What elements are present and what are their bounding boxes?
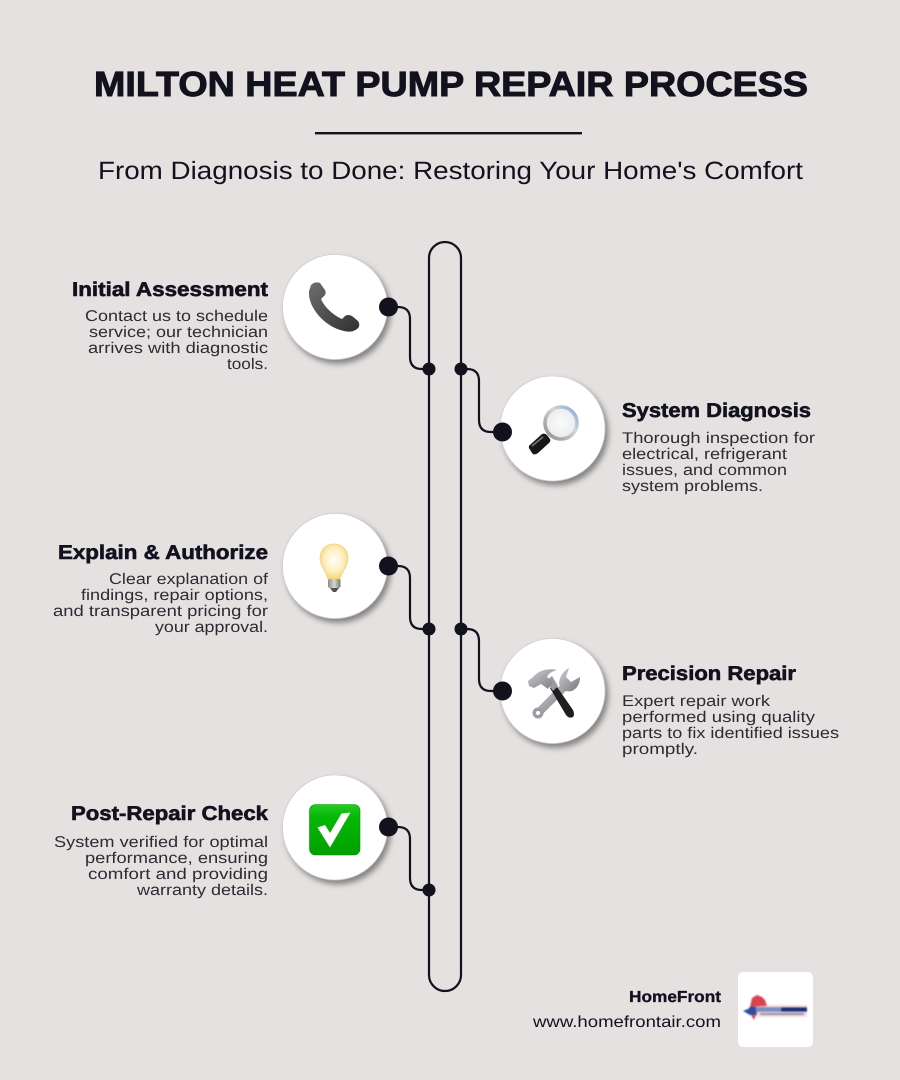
description: and transparent pricing for	[53, 603, 268, 620]
panel: system diagnosis	[493, 376, 815, 495]
description	[622, 430, 815, 495]
description: arrives with diagnostic	[88, 340, 268, 357]
description: parts to fix identified issues	[622, 725, 839, 742]
heading: System Diagnosis	[622, 400, 811, 422]
node circle 3	[282, 514, 388, 618]
timeline tube	[429, 242, 461, 991]
connector: step 3	[388, 566, 436, 636]
title: MILTON HEAT PUMP REPAIR PROCESS	[94, 65, 808, 104]
description	[53, 571, 269, 636]
panel: post-repair check	[54, 775, 398, 899]
connector: step 1	[388, 307, 436, 376]
description: Thorough inspection for	[622, 430, 815, 447]
footer: website: www.homefrontair.com	[532, 1014, 721, 1031]
description: electrical, refrigerant	[622, 446, 788, 463]
description: comfort and providing	[88, 866, 268, 883]
node circle 4	[500, 638, 605, 744]
connector: step 5	[388, 827, 436, 896]
heading: Explain & Authorize	[58, 542, 268, 564]
heading: Initial Assessment	[72, 279, 268, 301]
description: Contact us to schedule	[85, 308, 268, 325]
icon: magnifying glass	[529, 407, 577, 454]
icon: telephone	[309, 282, 359, 332]
icon: hammer and wrench	[528, 668, 580, 718]
description: tools.	[227, 356, 268, 373]
footer: company name: HomeFront	[629, 989, 722, 1006]
description: System verified for optimal	[54, 834, 268, 851]
description: findings, repair options,	[81, 587, 268, 604]
description: performed using quality	[622, 709, 815, 726]
description	[622, 693, 839, 758]
heading: Post-Repair Check	[71, 803, 269, 825]
heading: Precision Repair	[622, 663, 796, 685]
panel: explain and authorize	[53, 514, 398, 636]
node circle 1	[282, 254, 388, 360]
description	[54, 834, 268, 899]
icon: light bulb	[320, 544, 348, 592]
description: performance, ensuring	[85, 850, 268, 867]
description: your approval.	[155, 619, 268, 636]
description: system problems.	[622, 478, 763, 495]
node circle 5	[282, 775, 388, 880]
description: warranty details.	[136, 882, 268, 899]
panel: precision repair	[493, 638, 839, 758]
connector: step 2	[454, 362, 502, 432]
description: Expert repair work	[622, 693, 770, 710]
description: issues, and common	[622, 462, 787, 479]
description: promptly.	[622, 741, 698, 758]
panel: initial assessment	[72, 254, 398, 373]
icon: green check mark	[310, 804, 360, 855]
connector: step 4	[454, 622, 502, 691]
description: service; our technician	[89, 324, 268, 341]
subtitle: From Diagnosis to Done: Restoring Your Home's Comfort	[98, 157, 803, 185]
logo	[738, 972, 813, 1047]
description: Clear explanation of	[109, 571, 269, 588]
description	[85, 308, 268, 373]
node circle 2	[500, 376, 605, 481]
